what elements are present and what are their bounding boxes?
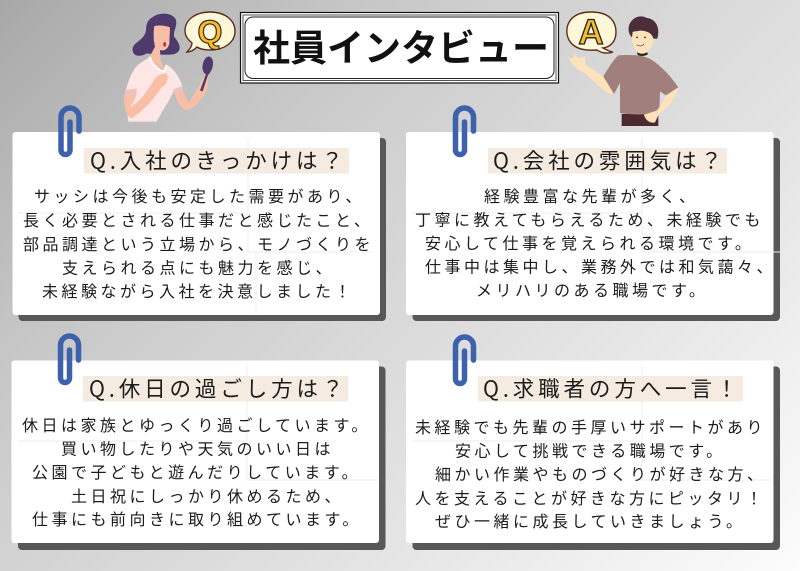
answer text: 経験豊富な先輩が多く、: [484, 183, 699, 207]
panel: card 1: [12, 108, 386, 321]
answer text: [415, 183, 776, 301]
answer text: 仕事にも前向きに取り組めています。: [32, 506, 362, 530]
answer text: 未経験でも先輩の手厚いサポートがあり: [415, 414, 766, 438]
answer text: 細かい作業やものづくりが好きな方、: [435, 461, 767, 485]
answer text: 支えられる点にも魅力を感じ、: [62, 254, 335, 278]
panel: card 4: [406, 337, 780, 550]
illustration: woman interviewer: [124, 14, 213, 122]
answer text: 安心して仕事を覚えられる環境です。: [425, 230, 754, 254]
title box: [240, 12, 558, 83]
answer text: 仕事中は集中し、業務外では和気藹々、: [425, 254, 776, 278]
paperclip: [60, 336, 78, 382]
answer text: [22, 412, 371, 530]
panel: card 3: [12, 336, 386, 550]
speech bubble: A: [567, 12, 616, 53]
answer text: メリハリのある職場です。: [476, 277, 708, 301]
answer text: 休日は家族とゆっくり過ごしています。: [22, 412, 371, 436]
question heading: Q.入社のきっかけは？: [90, 144, 347, 176]
paperclip: [456, 337, 474, 384]
answer text: 未経験ながら入社を決意しました！: [42, 278, 354, 302]
panel: card 2: [406, 108, 780, 321]
answer text: 買い物したりや天気のいい日は: [61, 436, 334, 460]
answer text: 丁寧に教えてもらえるため、未経験でも: [415, 206, 764, 230]
speech bubble: A: A: [578, 13, 604, 52]
question heading: Q.会社の雰囲気は？: [493, 144, 726, 176]
paperclip: [61, 108, 79, 154]
illustration: man answering: [569, 16, 678, 126]
answer text: 部品調達という立場から、モノづくりを: [23, 231, 374, 255]
answer text: 長く必要とされる仕事だと感じたこと、: [23, 207, 373, 231]
speech bubble: Q: [185, 12, 235, 52]
answer text: 公園で子どもと遊んだりしています。: [32, 459, 361, 483]
answer text: 人を支えることが好きな方にピッタリ！: [415, 485, 766, 509]
answer text: 土日祝にしっかり休めるため、: [71, 483, 344, 507]
answer text: サッシは今後も安定した需要があり、: [34, 183, 365, 207]
answer text: ぜひ一緒に成長していきましょう。: [435, 508, 746, 532]
answer text: [23, 183, 374, 302]
answer text: [415, 414, 767, 532]
question heading: Q.休日の過ごし方は？: [89, 372, 347, 404]
speech bubble: Q: Q: [198, 14, 222, 50]
paperclip: [456, 108, 474, 154]
question heading: Q.求職者の方へ一言！: [483, 372, 741, 404]
answer text: 安心して挑戦できる職場です。: [455, 438, 726, 462]
title text: 社員インタビュー: [253, 18, 549, 72]
